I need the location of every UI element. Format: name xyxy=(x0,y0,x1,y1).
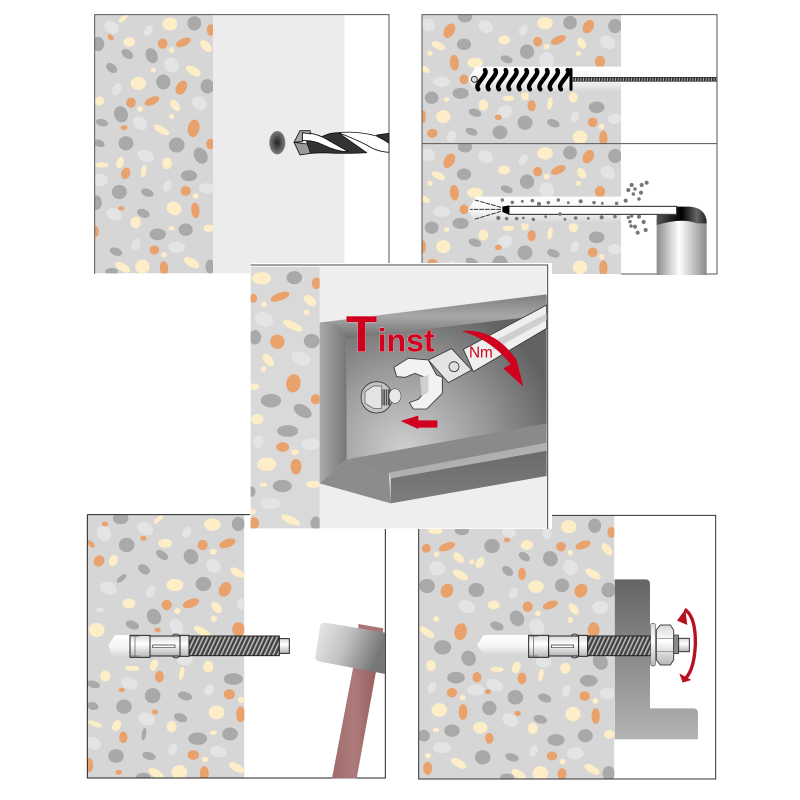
panel frame and divider xyxy=(422,15,717,274)
concrete wall, lower xyxy=(422,144,621,274)
lighter wall surface xyxy=(213,15,344,273)
concrete wall xyxy=(250,266,320,528)
icon: drill bit xyxy=(294,131,389,155)
drilled hole xyxy=(477,635,529,656)
panel: tightening the nut, side view xyxy=(419,515,716,780)
drilled hole, upper xyxy=(468,67,621,93)
label: Nm: Nm xyxy=(469,345,493,362)
drilled hole xyxy=(108,635,130,658)
arrow: rotation xyxy=(677,609,695,683)
panel frame xyxy=(87,515,385,778)
icon: anchor with nut xyxy=(529,623,689,666)
concrete wall, upper xyxy=(422,15,621,144)
concrete wall xyxy=(95,15,213,274)
panel frame xyxy=(95,15,389,274)
arrow: bolt direction xyxy=(401,416,437,429)
panel: installation torque xyxy=(248,263,552,529)
icon: wedge anchor xyxy=(130,634,289,658)
icon: hammer xyxy=(315,623,385,778)
icon: blow-out pump xyxy=(470,200,707,275)
label: T inst: inst xyxy=(378,323,435,359)
concrete wall xyxy=(88,515,244,778)
icon: drill hole mark xyxy=(269,131,285,154)
panel: drilling the hole xyxy=(93,15,389,275)
arrow: tightening direction xyxy=(462,331,523,387)
panel frame xyxy=(419,515,716,779)
icon: nut on bolt xyxy=(361,382,401,413)
panel frame xyxy=(251,265,548,529)
steel angle profile xyxy=(615,579,698,739)
panel: brushing and blowing out the hole xyxy=(421,12,717,275)
icon: cleaning brush xyxy=(471,69,717,89)
dust particles xyxy=(497,181,648,234)
steel angle beam xyxy=(320,294,547,503)
concrete wall xyxy=(419,516,614,778)
wall surface xyxy=(251,267,547,528)
drilled hole, lower xyxy=(468,197,621,223)
label: T inst xyxy=(346,306,435,363)
panel: hammering in the anchor xyxy=(85,514,385,779)
panel backing xyxy=(250,263,552,529)
icon: torque wrench xyxy=(394,305,547,409)
label: T inst: T xyxy=(346,306,377,363)
